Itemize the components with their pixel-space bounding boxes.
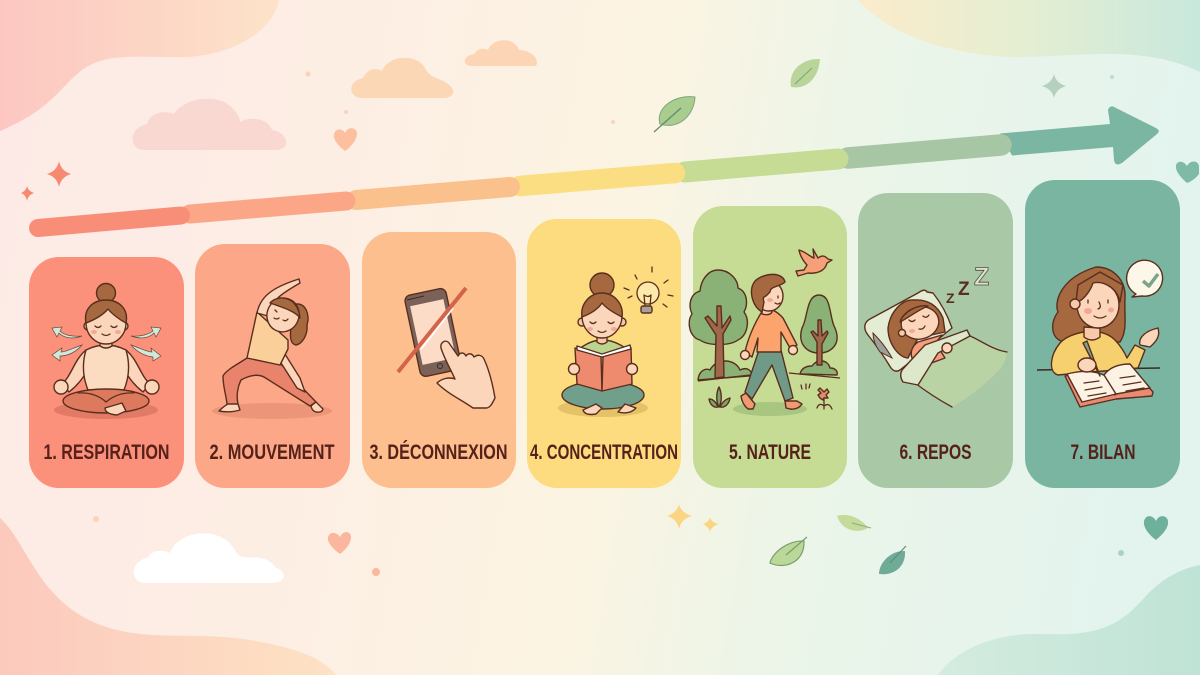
shadow [54, 401, 158, 419]
cloud: peach small [465, 40, 537, 66]
leaf: top center [654, 97, 695, 132]
card 2: mouvement [195, 244, 350, 488]
card 1: respiration [29, 257, 184, 488]
progress arrow [38, 106, 1159, 228]
bird [796, 249, 832, 276]
label: 5. NATURE [729, 441, 811, 464]
sleep letters: Z [958, 279, 970, 300]
background blob: top right [858, 0, 1200, 72]
walking person [740, 274, 802, 409]
light bulb [624, 267, 673, 313]
plants [709, 384, 832, 409]
label: 3. DÉCONNEXION [370, 441, 508, 464]
shadow [558, 399, 648, 417]
star: coral small [21, 186, 34, 201]
card 5: nature [689, 206, 847, 488]
card 6: repos [858, 193, 1013, 488]
background blob: top left [0, 0, 279, 131]
card 7: bilan [1025, 180, 1180, 488]
background blob: bottom right [938, 565, 1200, 675]
left tree [689, 270, 751, 381]
label: 6. REPOS [900, 441, 972, 464]
blanket [915, 334, 1007, 407]
reading person [562, 273, 644, 414]
heart: top [334, 128, 357, 151]
label: 7. BILAN [1070, 441, 1136, 464]
blanket outline [915, 335, 1007, 407]
star: coral large [47, 161, 71, 187]
shadow [212, 403, 332, 419]
crossed phone [398, 288, 466, 377]
open book [1065, 364, 1153, 407]
leaf: lower 2 [837, 515, 871, 531]
background blob: bottom left [0, 518, 336, 675]
small dots [93, 72, 1124, 576]
star: teal [1042, 74, 1066, 98]
breath arrows [52, 327, 161, 361]
shadow [733, 402, 807, 416]
sleep letters [946, 263, 989, 306]
label: 2. MOUVEMENT [210, 441, 335, 464]
cloud: peach large [351, 58, 453, 98]
star: yellow small [703, 517, 718, 532]
card 4: concentration [527, 219, 681, 488]
cloud: white [134, 533, 284, 583]
label: 1. RESPIRATION [44, 441, 170, 464]
right tree [789, 295, 840, 378]
pillow [865, 290, 952, 371]
pointing hand [437, 341, 495, 408]
person writing [1037, 267, 1160, 375]
speech bubble check [1127, 260, 1163, 297]
sleep letters: Z [946, 290, 955, 306]
meditating person [54, 284, 159, 415]
heart: bottom [328, 532, 351, 554]
pen and hand [1078, 341, 1100, 376]
star: yellow large [667, 504, 692, 529]
heart: right bottom [1144, 516, 1168, 540]
sleeping person [888, 300, 945, 358]
sleep letters: Z [974, 263, 989, 291]
stretching person [219, 279, 323, 412]
label: 4. CONCENTRATION [530, 441, 678, 464]
arm [911, 335, 945, 368]
card 3: déconnexion [362, 232, 516, 488]
leaf: top right [791, 59, 820, 87]
leaf: lower teal [879, 546, 906, 574]
blanket fold [901, 330, 970, 385]
leaf: lower 1 [770, 537, 807, 565]
cloud: pink [132, 99, 286, 150]
heart: right top [1176, 162, 1199, 183]
